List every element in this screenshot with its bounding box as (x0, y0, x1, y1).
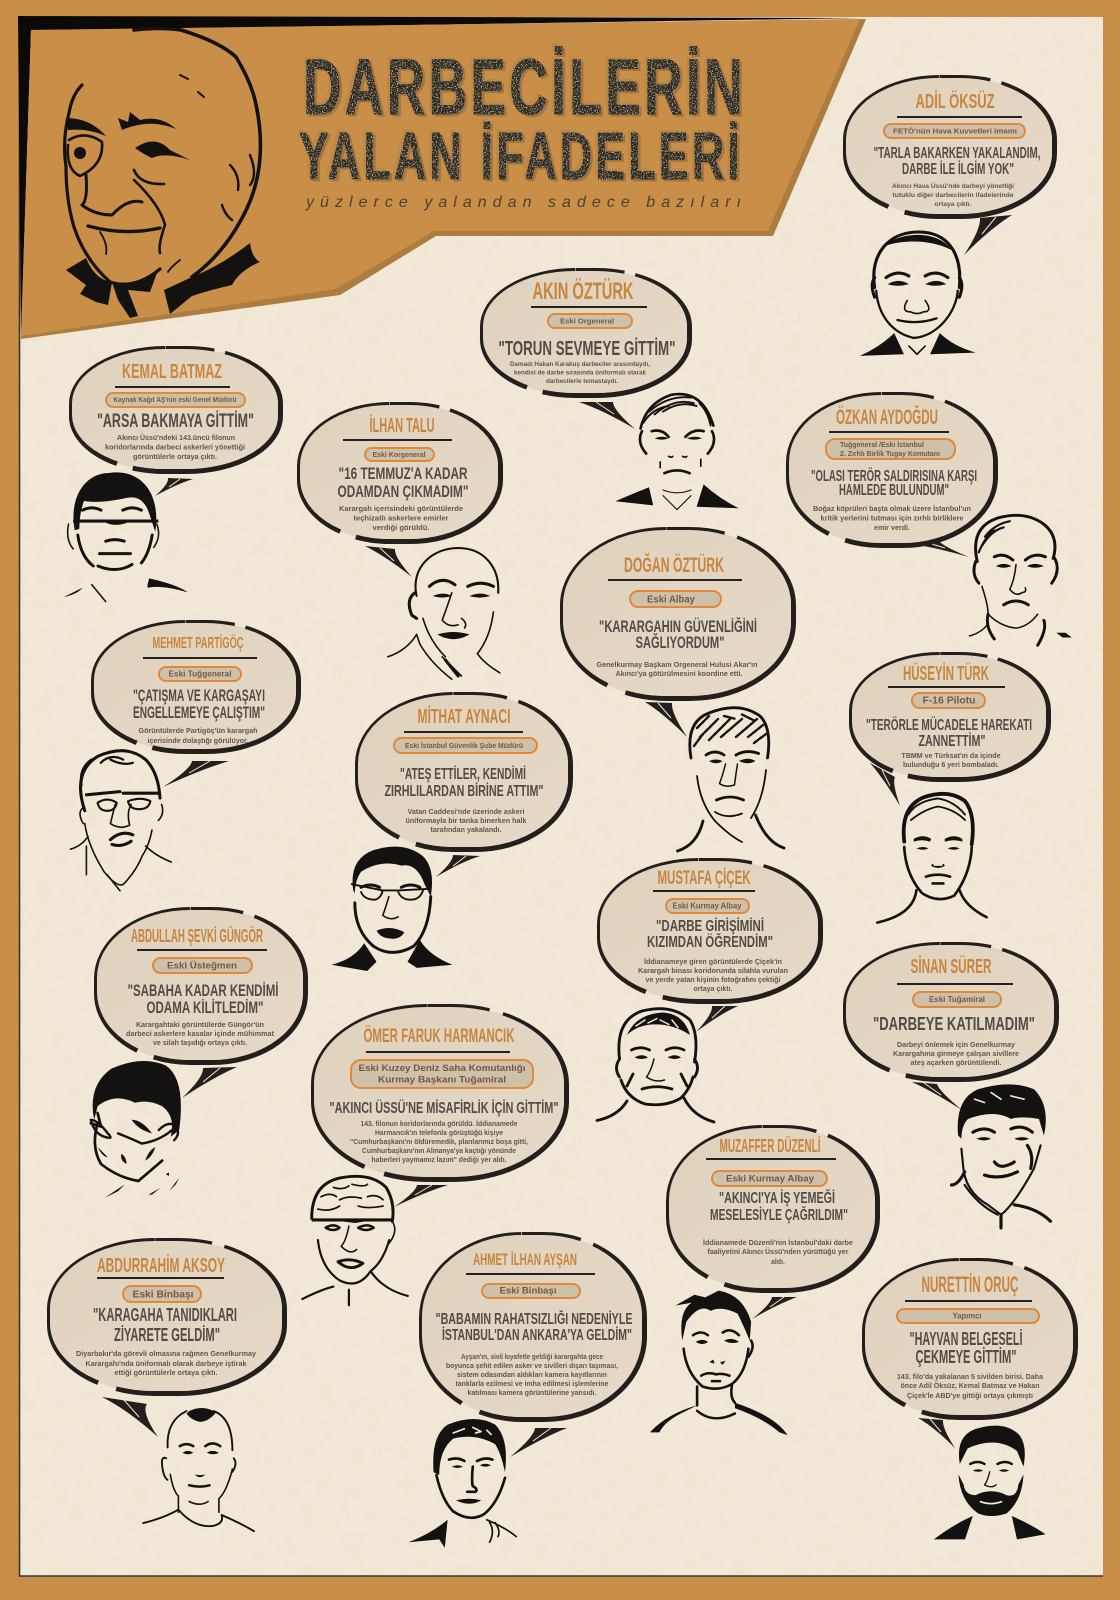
description: Karargah binası koridorunda silahla vurulan (638, 966, 788, 975)
description: haberleri yaymamız lazım" dediği yer aldı. (372, 1155, 506, 1164)
role pill (106, 393, 245, 407)
description: ateş açarken görüntülendi. (910, 1058, 1002, 1067)
quote (910, 1329, 1022, 1367)
quote: "KARARGAHIN GÜVENLİĞİNİ (599, 617, 757, 636)
panel: Kemal Batmaz (64, 348, 280, 602)
panel: Mustafa Çiçek (597, 860, 820, 1122)
role pill: Eski Korgeneral (372, 450, 426, 459)
icon: large portrait in banner (65, 28, 260, 318)
quote: ZİYARETE GELDİM" (114, 1325, 220, 1345)
name: ÖZKAN AYDOĞDU (836, 405, 938, 429)
description: TBMM ve Türksat'ın da içinde (902, 751, 1000, 760)
quote: ZIRHLILARDAN BİRİNE ATTIM" (384, 782, 544, 800)
name: NURETTİN ORUÇ (922, 1272, 1019, 1297)
quote: ZANNETTİM" (918, 732, 986, 750)
description: teçhizatlı askerlere emirler (354, 514, 449, 522)
quote: "TORUN SEVMEYE GİTTİM" (498, 337, 676, 360)
role pill: Eski Binbaşı (132, 1290, 194, 1300)
panel: Özkan Aydoğdu (788, 394, 1072, 645)
panel: Hüseyin Türk (852, 654, 1048, 923)
description: içerisinde dolaştığı görülüyor. (148, 736, 248, 745)
speech bubble (482, 270, 690, 429)
description: koridorlarında darbeci askerleri yönettiği (105, 442, 245, 452)
description: katılması kamera görüntülerine yansıdı. (468, 1390, 597, 1397)
quote: "KARAGAHA TANIDIKLARI (93, 1305, 237, 1325)
description (893, 1040, 1019, 1067)
description: Karargahına girmeye çalışan sivillere (893, 1049, 1019, 1058)
quote: ÇEKMEYE GİTTİM" (916, 1347, 1016, 1367)
name: HÜSEYİN TÜRK (903, 662, 989, 685)
name: SİNAN SÜRER (910, 955, 992, 978)
quote: MESELESİYLE ÇAĞRILDIM" (710, 1205, 848, 1224)
speech bubble (50, 1240, 284, 1437)
role pill: Eski Kurmay Albay (726, 1174, 815, 1184)
speech bubble (300, 404, 500, 577)
role pill (351, 1060, 533, 1088)
description: faaliyetini Akıncı Üssü'nden yürüttüğü yer (708, 1247, 849, 1256)
icon: portrait (332, 847, 452, 971)
description: boyunca şehit edilen asker ve sivilleri dışarı taşıması, (446, 1363, 618, 1370)
icon: portrait (934, 1426, 1046, 1539)
icon: portrait (91, 1061, 181, 1205)
icon: portrait (302, 1176, 408, 1305)
panel: Akın Öztürk (482, 270, 739, 510)
role pill (630, 591, 721, 607)
quote (384, 765, 544, 800)
icon: portrait (70, 751, 171, 891)
description (339, 504, 463, 532)
quote: ODAMA KİLİTLEDİM" (146, 998, 264, 1017)
quote (647, 917, 773, 951)
name: MEHMET PARTİGÖÇ (152, 633, 244, 652)
role pill (548, 314, 632, 328)
panel: Mithat Aynacı (332, 694, 570, 971)
description: Akıncı'ya götürülmesini koordine etti. (616, 669, 742, 678)
role pill (826, 439, 955, 459)
speech bubble (314, 1006, 566, 1207)
quote: ODAMDAN ÇIKMADIM" (338, 482, 468, 501)
quote: DARBE İLE İLGİM YOK" (902, 160, 1014, 178)
description: emir verdi. (874, 523, 910, 532)
description (897, 1372, 1044, 1400)
role pill: Eski Kuzey Deniz Saha Komutanlığı (358, 1063, 526, 1074)
role pill (394, 738, 537, 753)
title: DARBECİLERİN (303, 42, 746, 131)
banner (18, 16, 866, 340)
description: ortaya çıktı. (694, 984, 732, 993)
description (105, 433, 245, 461)
role pill: FETÖ'nün Hava Kuvvetleri imamı (893, 126, 1017, 136)
quote (128, 981, 278, 1017)
icon: portrait (143, 1408, 254, 1531)
description: darbeci askerlere kasalar içinde mühimmat (126, 1029, 274, 1038)
description: tanklarla ezilmesi ve imha edilmesi işlemlerine (456, 1381, 609, 1388)
description: Ayşan'ın, sivil kıyafetle geldiği karargahta gece (461, 1354, 603, 1361)
speech bubble (600, 860, 820, 1032)
description (638, 957, 788, 993)
name: KEMAL BATMAZ (122, 361, 222, 383)
role pill (153, 958, 252, 973)
description (138, 726, 258, 745)
description: Diyarbakır'da görevli olmasına rağmen Genelkurmay (76, 1349, 257, 1358)
description: sistem odasından aldıkları kamera kayıtlarının (457, 1372, 607, 1379)
quote: ENGELLEMEYE ÇALIŞTIM" (133, 703, 265, 722)
description: Akıncı Üssü'ndeki 143.üncü filonun (117, 433, 235, 442)
description: tutuklu diğer darbecilerin ifadelerinde (892, 192, 1014, 199)
description: 143. filo'da yakalanan 5 sivilden birisi. Daha (897, 1372, 1044, 1381)
description: Genelkurmay Başkanı Orgeneral Hulusi Akar'ın (596, 660, 758, 669)
name: İLHAN TALU (370, 414, 434, 437)
speech bubble (562, 530, 794, 737)
role pill: Kurmay Başkanı Tuğamiral (378, 1074, 506, 1086)
role pill: Eski Kurmay Albay (672, 902, 742, 910)
description: Karargahtaki görüntülerde Güngör'ün (136, 1020, 264, 1029)
quote: "ATEŞ ETTİLER, KENDİMİ (400, 765, 526, 783)
role pill: 2. Zırhlı Birlik Tugay Komutanı (840, 449, 940, 458)
speech bubble (846, 78, 1054, 255)
role pill: Eski Tuğgeneral (168, 670, 232, 678)
role pill (365, 448, 434, 461)
quote (811, 466, 977, 499)
icon: portrait (597, 1009, 714, 1122)
description: Boğaz köprüleri başta olmak üzere İstanbul'un (813, 504, 971, 513)
title (299, 42, 746, 194)
quote: İSTANBUL'DAN ANKARA'YA GELDİM" (442, 1326, 632, 1344)
role pill: Eski Tuğamiral (929, 995, 985, 1004)
description: Çiçek'le ABD'ye gittiği ortaya çıkmıştı (907, 1391, 1033, 1400)
quote: SAĞLIYORDUM" (636, 633, 724, 652)
quote (866, 715, 1032, 750)
name: MİTHAT AYNACI (418, 705, 510, 728)
description: verdiği görüldü. (372, 523, 430, 532)
description: ve yerde yatan kişinin fotoğrafını çektiği (646, 975, 780, 984)
quote (436, 1309, 633, 1344)
role pill: Eski İstanbul Güvenlik Şube Müdürü (405, 741, 523, 750)
description (406, 807, 527, 834)
icon: portrait (615, 394, 739, 510)
name: DOĞAN ÖZTÜRK (624, 553, 724, 577)
role pill: Eski Orgeneral (560, 316, 614, 326)
description: tarafından yakalandı. (430, 825, 502, 834)
quote: "HAYVAN BELGESELİ (910, 1329, 1022, 1349)
role pill (884, 124, 1025, 138)
description: Darbeyi önlemek için Genelkurmay (897, 1040, 1016, 1049)
description: bulunduğu 6 yeri bombaladı. (903, 760, 999, 769)
name: AHMET İLHAN AYŞAN (473, 1250, 577, 1269)
description (510, 361, 650, 385)
quote: "OLASI TERÖR SALDIRISINA KARŞI (811, 466, 977, 485)
icon: portrait (860, 232, 976, 356)
panel: Nurettin Oruç (864, 1260, 1076, 1539)
role pill (123, 1286, 201, 1302)
icon: portrait (952, 1084, 1050, 1228)
quote (599, 617, 757, 652)
description: Akıncı Hava Üssü'nde darbeyi yönettiği (892, 181, 1014, 190)
quote: HAMLEDE BULUNDUM" (839, 482, 949, 499)
name: ÖMER FARUK HARMANCIK (364, 1026, 515, 1047)
description: önce Adil Öksüz, Kemal Batmaz ve Hakan (900, 1381, 1040, 1390)
description: ortaya çıktı. (934, 201, 972, 208)
speech bubble (72, 348, 280, 496)
description: ve silah taşıdığı ortaya çıktı. (153, 1038, 247, 1047)
name: ADİL ÖKSÜZ (916, 90, 994, 113)
role pill (712, 1171, 827, 1186)
role pill: Tuğgeneral /Eski İstanbul (840, 440, 924, 449)
panel: Ömer Faruk Harmancık (302, 1006, 566, 1305)
description: 143. filonun koridorlarında görüldü. İddianamede (360, 1119, 518, 1128)
role pill (159, 667, 241, 681)
description: aldı. (771, 1257, 785, 1266)
role pill: Eski Üsteğmen (167, 960, 237, 970)
role pill: Eski Binbaşı (500, 1286, 556, 1296)
description (446, 1354, 618, 1397)
description: İddianameye giren görüntülerde Çiçek'in (644, 957, 782, 966)
role pill (897, 1309, 1039, 1323)
speech bubble (358, 694, 570, 877)
name: ABDURRAHİM AKSOY (97, 1254, 225, 1277)
description: ettiği görüntülerle ortaya çıktı. (114, 1368, 218, 1377)
speech bubble (94, 622, 298, 787)
icon: portrait (388, 548, 500, 679)
description: Cumhurbaşkanı'nın Almanya'ya kaçtığı yönünde (362, 1146, 516, 1155)
quote: "DARBE GİRİŞİMİNİ (656, 917, 764, 935)
role pill: F-16 Pilotu (922, 696, 976, 706)
quote: "BABAMIN RAHATSIZLIĞI NEDENİYLE (436, 1309, 633, 1328)
panel: İlhan Talu (300, 404, 500, 679)
role pill: Eski Albay (647, 594, 695, 606)
speech bubble (788, 394, 996, 557)
description: Karargahı'nda üniformalı olarak darbeye iştirak (86, 1359, 247, 1368)
role pill: Kaynak Kağıt AŞ'nin eski Genel Müdürü (114, 395, 236, 404)
description (126, 1020, 274, 1047)
icon: portrait (64, 472, 188, 602)
title: YALAN İFADELERİ (299, 119, 743, 194)
speech bubble (864, 1260, 1076, 1448)
description (902, 751, 1000, 769)
role pill (912, 693, 985, 708)
panel: Abdurrahim Aksoy (50, 1240, 284, 1531)
quote (710, 1188, 848, 1224)
description (596, 660, 758, 678)
quote: KIZIMDAN ÖĞRENDİM" (647, 932, 773, 951)
description (703, 1238, 853, 1266)
name: MUZAFFER DÜZENLİ (720, 1136, 820, 1156)
description (813, 504, 971, 532)
quote: "ÇATIŞMA VE KARGAŞAYI (133, 686, 265, 705)
panel: Muzaffer Düzenli (650, 1128, 878, 1435)
quote (874, 145, 1040, 178)
description: Harmancık'ın telefonla görüştüğü kişiye (375, 1128, 503, 1137)
description: darbecilerle temastaydı. (546, 378, 618, 385)
description: görüntülerle ortaya çıktı. (133, 452, 217, 461)
speech bubble (846, 944, 1056, 1110)
panel: Doğan Öztürk (562, 530, 794, 851)
panel: Adil Öksüz (846, 78, 1054, 356)
quote (338, 464, 468, 501)
description: Vatan Caddesi'nde üzerinde askeri (408, 807, 524, 816)
description (350, 1119, 528, 1164)
subtitle: yüzlerce yalandan sadece bazıları (305, 194, 741, 211)
description: kritik yerlerini tutması için zırhlı birliklere (820, 514, 964, 522)
description: Damadı Hakan Karakuş darbeciler arasındaydı, (510, 361, 650, 368)
description: Görüntülerde Partigöç'ün karargah (138, 726, 258, 735)
description (76, 1349, 257, 1377)
description: İddianamede Düzenli'nin İstanbul'daki darbe (703, 1238, 853, 1247)
role pill: Yapımcı (952, 1312, 982, 1320)
panel: Mehmet Partigöç (70, 622, 299, 891)
quote: "16 TEMMUZ'A KADAR (338, 464, 468, 483)
name: MUSTAFA ÇİÇEK (658, 868, 751, 889)
role pill (666, 899, 749, 913)
speech bubble (668, 1128, 878, 1319)
name: ABDULLAH ŞEVKİ GÜNGÖR (131, 926, 263, 946)
quote: "ARSA BAKMAYA GİTTİM" (97, 411, 254, 432)
description: "Cumhurbaşkanı'nı öldüremedik, planlarımız boşa gitti, (350, 1137, 528, 1146)
quote: "DARBEYE KATILMADIM" (873, 1014, 1035, 1034)
speech bubble (96, 910, 306, 1098)
icon: portrait (970, 515, 1072, 645)
quote: "SABAHA KADAR KENDİMİ (128, 981, 278, 1000)
role pill (482, 1284, 580, 1298)
name: AKIN ÖZTÜRK (532, 278, 634, 305)
panel: Abdullah Şevki Güngör (91, 910, 306, 1205)
quote (93, 1305, 237, 1345)
speech bubble (852, 654, 1048, 806)
description: kendisi de darbe sırasında üniformalı olarak (514, 370, 646, 376)
description (892, 181, 1014, 208)
description: Karargah içerisindeki görüntülerde (339, 504, 463, 513)
icon: portrait (877, 794, 987, 923)
speech bubble (422, 1234, 644, 1457)
quote: "AKINCI'YA İŞ YEMEĞİ (719, 1188, 835, 1207)
quote (133, 686, 265, 722)
panel: Sinan Sürer (846, 944, 1056, 1228)
icon: portrait (408, 1419, 516, 1548)
icon: portrait (678, 708, 784, 851)
panel: Ahmet İlhan Ayşan (408, 1234, 644, 1548)
icon: portrait (650, 1291, 788, 1435)
role pill (913, 992, 1001, 1007)
quote: "AKINCI ÜSSÜ'NE MİSAFİRLİK İÇİN GİTTİM" (330, 1098, 558, 1117)
description: üniformayla bir tanka binerken halk (406, 816, 527, 825)
